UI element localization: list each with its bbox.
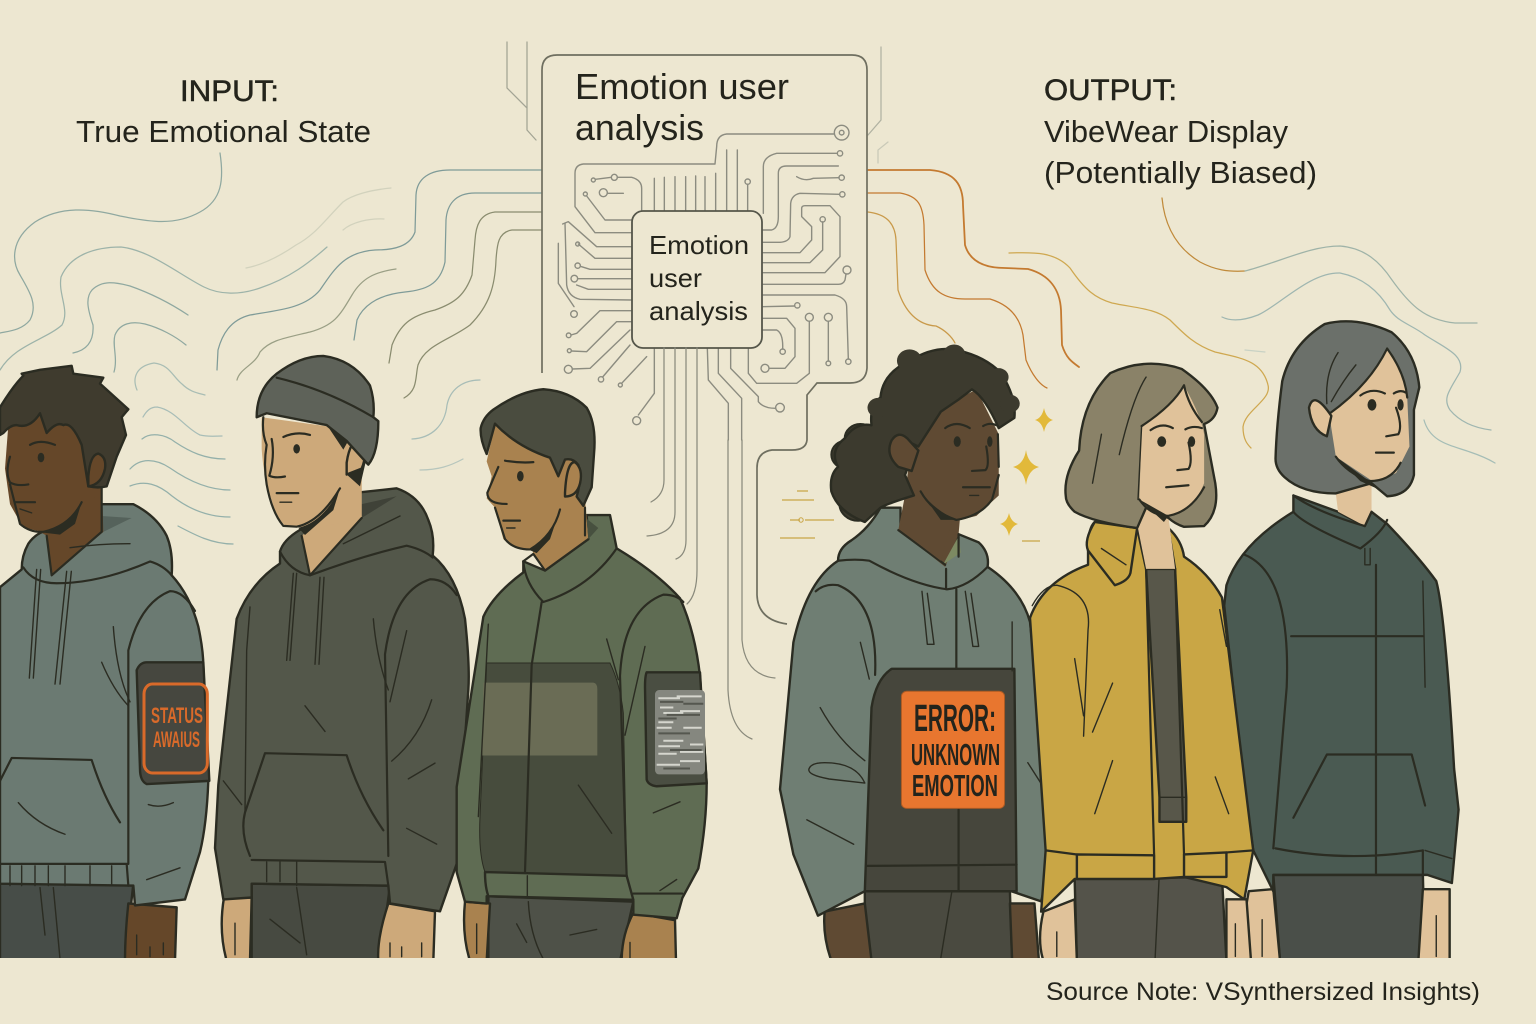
central chip: analysis [649, 296, 748, 326]
central chip [632, 211, 762, 348]
armband label: status awaius [151, 703, 203, 752]
input heading: True Emotional State [76, 114, 371, 149]
heading: emotion user analysis: analysis [575, 107, 704, 148]
circuit traces [558, 125, 851, 440]
error display text: UNKNOWN [911, 737, 1000, 772]
error display text: EMOTION [912, 768, 998, 803]
person 3: input, green jacket with glitched armband [457, 389, 707, 961]
circuit stubs above the box [507, 42, 888, 163]
person 4: output, hoodie with error display [780, 344, 1050, 961]
input heading [76, 75, 371, 149]
output heading [1044, 74, 1317, 190]
armband label: status awaius: STATUS [151, 703, 203, 728]
central chip: Emotion [649, 230, 749, 260]
output flow lines [868, 170, 1495, 463]
input heading: INPUT: [180, 75, 279, 108]
circuit traces running down from chip [647, 348, 775, 739]
panel: emotion user analysis [542, 55, 867, 624]
output heading: (Potentially Biased) [1044, 155, 1317, 190]
central chip: user [649, 263, 702, 293]
output heading: VibeWear Display [1044, 114, 1288, 149]
person 5: output, yellow jacket [1030, 364, 1253, 961]
error display text: ERROR: [914, 698, 996, 740]
person 1: input, hoodie with status armband [0, 366, 209, 961]
heading: emotion user analysis [575, 66, 789, 148]
gold data ticks and sparkles [780, 408, 1053, 541]
heading: emotion user analysis: Emotion user [575, 66, 789, 107]
output heading: OUTPUT: [1044, 74, 1177, 107]
input flow lines [0, 153, 542, 544]
person 2: input, beanie and hoodie [215, 356, 469, 961]
error display text [911, 698, 1000, 803]
source note: Source Note: VSynthersized Insights) [1046, 978, 1480, 1006]
armband label: status awaius: AWAIUS [153, 727, 200, 752]
person 6: output, dark green zip jacket [1224, 321, 1459, 961]
